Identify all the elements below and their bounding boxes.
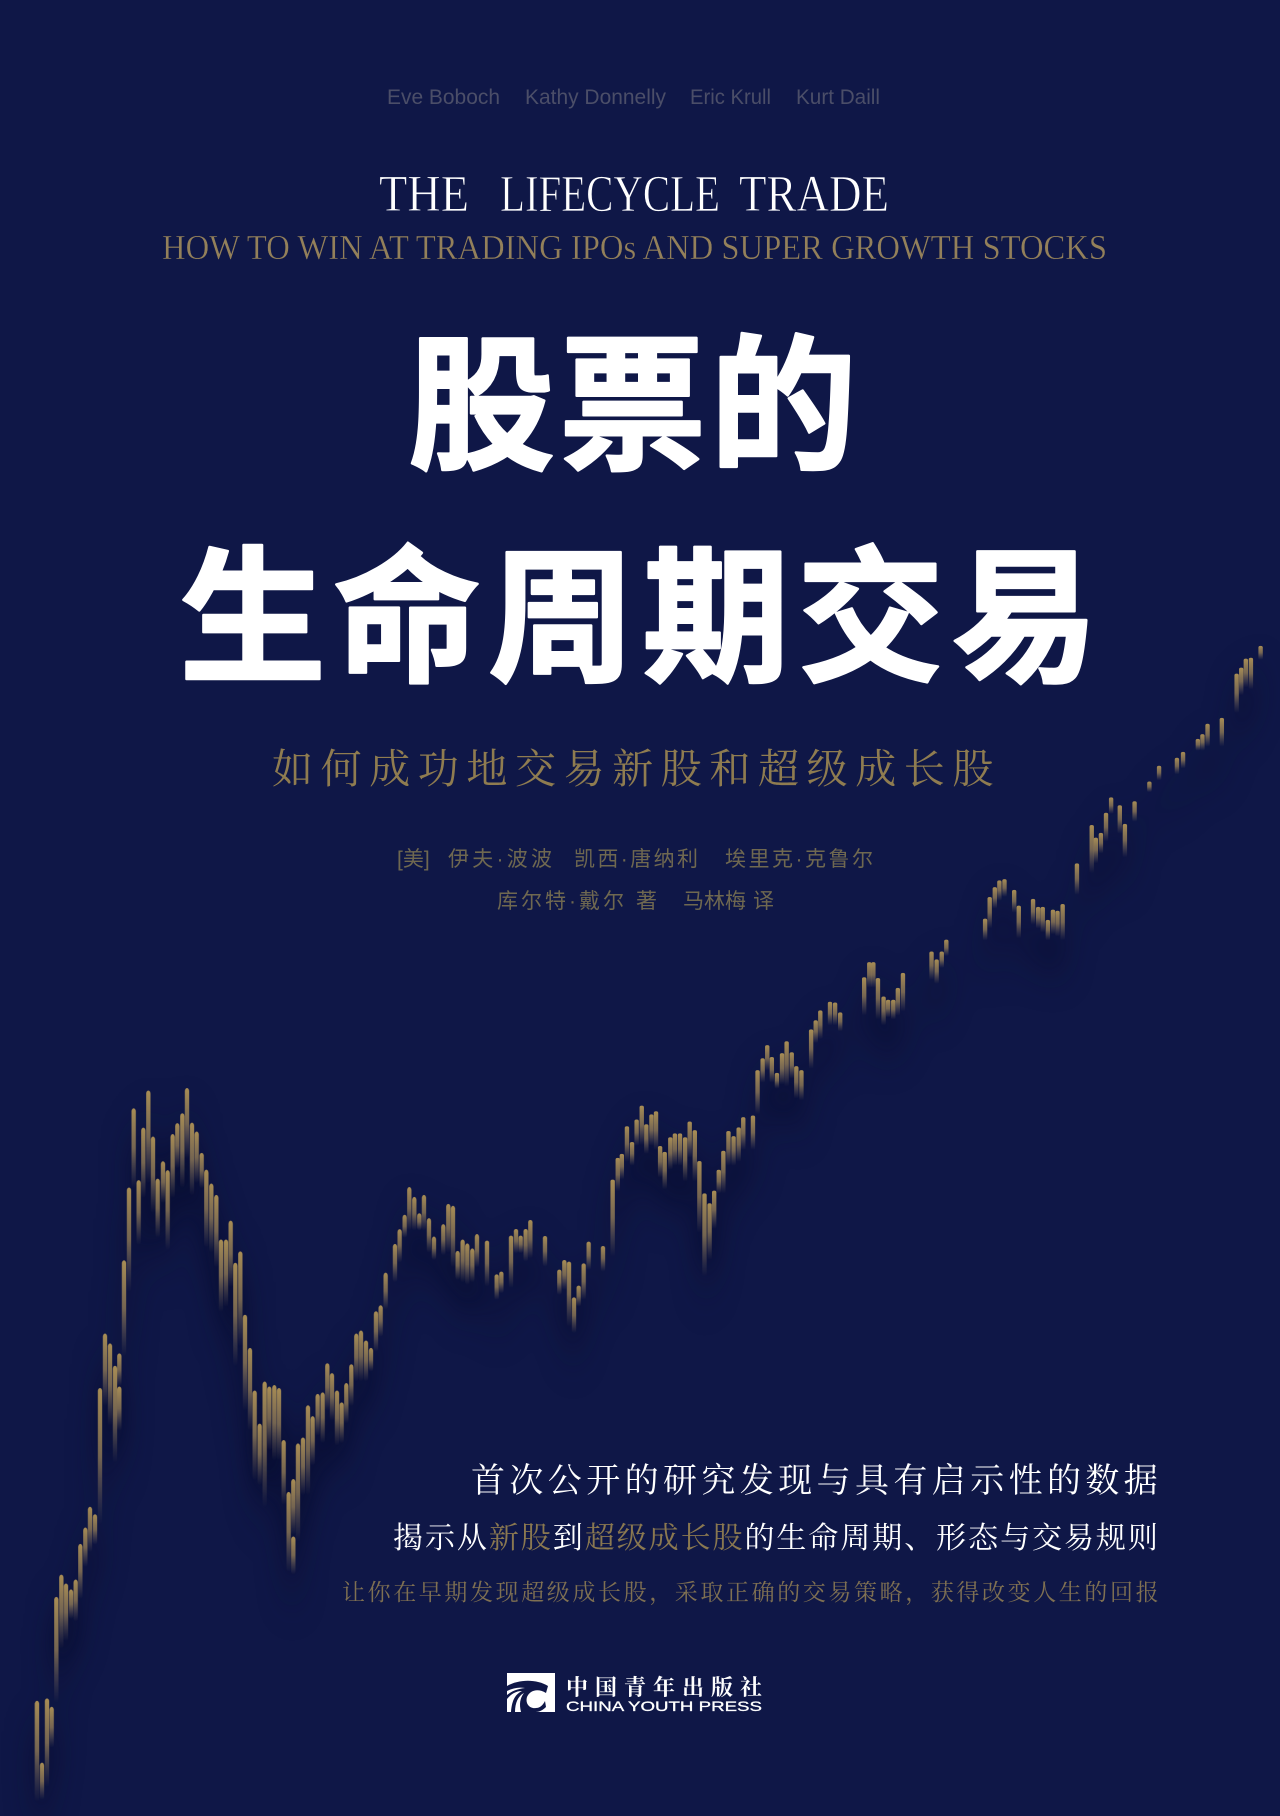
english title: TRADE	[739, 166, 889, 223]
english authors: Kathy Donnelly	[525, 86, 666, 109]
chinese authors: 凯西·唐纳利	[574, 848, 698, 871]
english authors	[387, 86, 880, 109]
chinese authors: 马林梅	[683, 890, 746, 913]
bars: right uptrend	[610, 646, 1263, 1277]
english authors: Eric Krull	[690, 86, 771, 109]
english title	[379, 166, 889, 223]
chinese authors: [美]	[397, 848, 430, 871]
bars: left rally and first peak	[35, 1088, 479, 1802]
main title: 生命周期交易	[179, 538, 1106, 702]
publisher chinese name: 中国青年出版社	[566, 1675, 762, 1700]
price chart	[35, 646, 1263, 1802]
chinese subtitle: 如何成功地交易新股和超级成长股	[272, 746, 1001, 792]
chinese authors	[397, 848, 873, 913]
logo icon	[507, 1673, 555, 1712]
main title	[179, 326, 1106, 702]
english title: THE	[379, 166, 469, 223]
publisher english name: CHINA YOUTH PRESS	[566, 1698, 762, 1714]
chinese authors: 著	[636, 890, 657, 913]
bottom tagline	[342, 1462, 1162, 1606]
english authors: Eve Boboch	[387, 86, 500, 109]
bars: middle trough	[485, 1220, 605, 1333]
tagline line 3: 让你在早期发现超级成长股，采取正确的交易策略，获得改变人生的回报	[342, 1580, 1161, 1606]
english authors: Kurt Daill	[796, 86, 880, 109]
main title: 股票的	[408, 326, 861, 490]
tagline line 1: 首次公开的研究发现与具有启示性的数据	[471, 1462, 1162, 1500]
chinese authors: 伊夫·波波	[448, 848, 552, 871]
english subtitle: HOW TO WIN AT TRADING IPOs AND SUPER GROWTH STOCKS	[162, 228, 1107, 267]
chinese authors: 译	[753, 890, 774, 913]
chart bars	[35, 646, 1263, 1802]
chinese authors: 埃里克·克鲁尔	[725, 848, 873, 871]
publisher logo	[507, 1673, 762, 1714]
tagline line 2: 揭示从新股到超级成长股的生命周期、形态与交易规则	[393, 1522, 1160, 1555]
chinese authors: 库尔特·戴尔	[497, 890, 624, 913]
chart shadow	[35, 646, 1263, 1802]
english title: LIFECYCLE	[500, 166, 720, 223]
